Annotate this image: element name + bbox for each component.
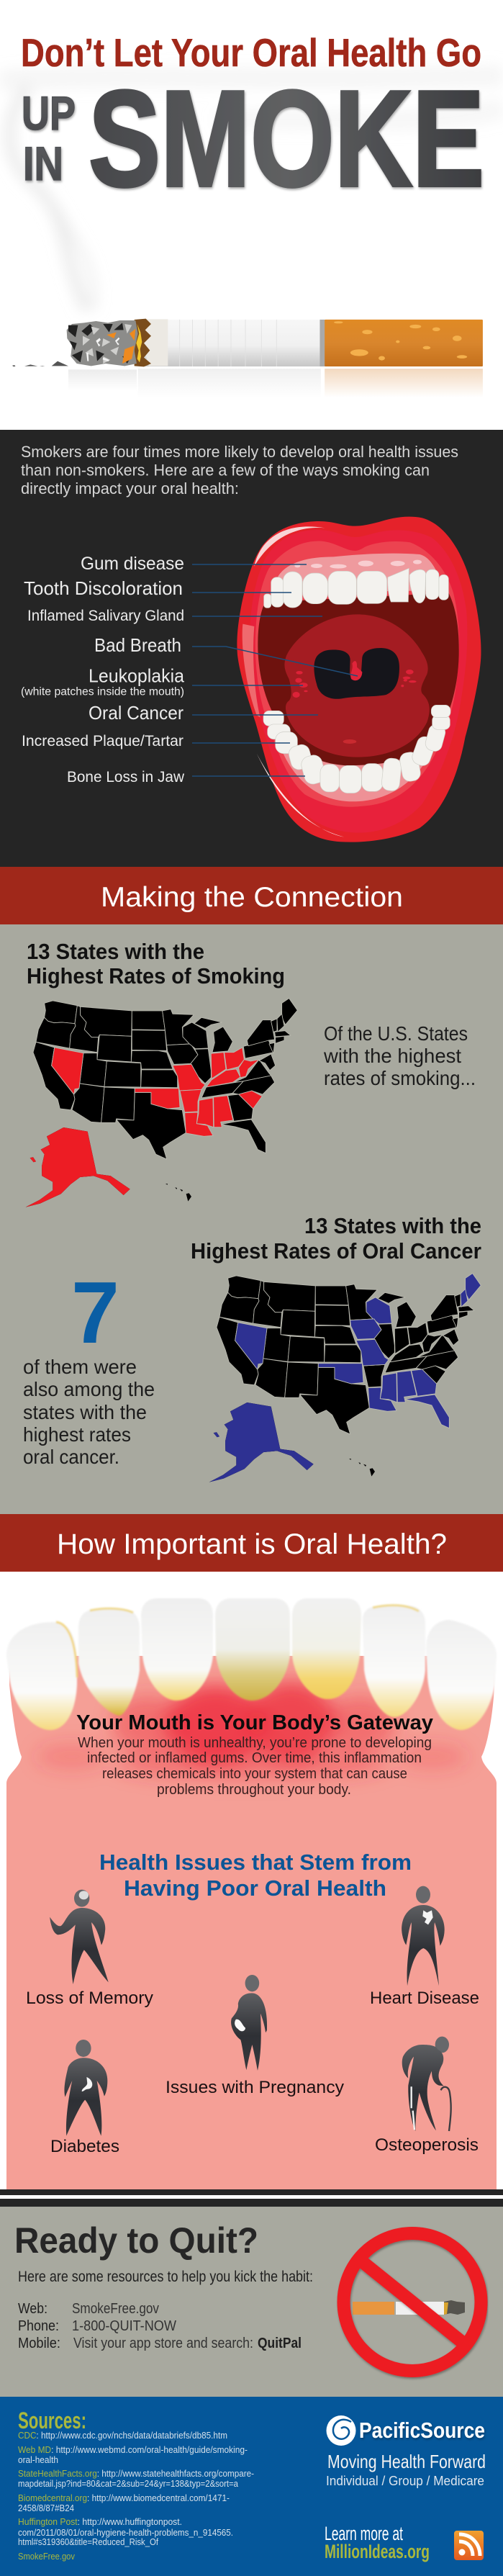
text: of them were: highest rates <box>23 1423 131 1446</box>
text: of them were: states with the <box>23 1401 147 1423</box>
logo: PacificSource wordmark: PacificSource <box>359 2418 485 2443</box>
label: Increased Plaque/Tartar: Increased Plaque/Tartar <box>22 733 183 749</box>
label: Leukoplakia: (white patches inside the mouth) <box>21 685 184 698</box>
text: mobile: QuitPal <box>258 2336 302 2351</box>
label: Gum disease: Gum disease <box>81 554 184 574</box>
label: Diabetes: Diabetes <box>50 2137 119 2156</box>
text: phone <box>18 2318 176 2334</box>
header background <box>0 0 503 430</box>
heading: highest rates of oral cancer: Highest Rates of Oral Cancer <box>191 1238 481 1264</box>
heading: Your Mouth is Your Body's Gateway: Your Mouth is Your Body’s Gateway <box>76 1711 433 1734</box>
text: gateway description: problems throughout your body. <box>157 1782 351 1798</box>
text: of them were: of them were <box>23 1356 137 1378</box>
label: Loss of Memory: Loss of Memory <box>26 1989 153 2008</box>
icon: RSS <box>454 2531 484 2560</box>
heading: highest rates of smoking <box>27 939 285 988</box>
text: source list: html#s319360&title=Reduced_Risk_Of <box>18 2536 158 2547</box>
banner: How Important is Oral Health: How Important is Oral Health? <box>57 1528 447 1560</box>
text: of the U.S. states: Of the U.S. States <box>324 1022 468 1045</box>
map: smoking states <box>26 999 297 1207</box>
intro text <box>21 443 458 497</box>
icon: burning cigarette <box>12 319 483 397</box>
tagline: Individual / Group / Medicare: Individual / Group / Medicare <box>326 2474 484 2488</box>
icon: pregnant person <box>231 1975 267 2071</box>
title: IN: IN <box>23 137 63 190</box>
text: source list: Web MD: http://www.webmd.com/oral-health/guide/smoking- <box>18 2444 248 2455</box>
divider bars <box>0 2189 503 2207</box>
panel: dark mouth section <box>0 430 503 867</box>
text: source list: CDC: http://www.cdc.gov/nchs/data/databriefs/db85.htm <box>18 2430 227 2441</box>
text: gateway description: When your mouth is unhealthy, you’re prone to developing <box>78 1735 432 1751</box>
text: of the U.S. states: with the highest <box>323 1045 461 1067</box>
banner: Making the Connection: Making the Connection <box>101 882 403 913</box>
text: source list: oral-health <box>18 2454 58 2465</box>
label: Osteoperosis: Osteoperosis <box>375 2135 479 2155</box>
text: of the U.S. states: rates of smoking... <box>324 1067 476 1089</box>
icon: no smoking sign <box>344 2233 481 2371</box>
label: Leukoplakia <box>21 665 185 698</box>
text: gateway description: infected or inflamed gums. Over time, this inflammation <box>87 1750 422 1766</box>
intro text: directly impact your oral health: <box>21 479 239 497</box>
text: phone: Phone: <box>18 2318 59 2334</box>
text: phone: 1-800-QUIT-NOW <box>72 2318 176 2334</box>
text: web: Web: <box>18 2301 47 2317</box>
illustration: open mouth <box>237 517 481 842</box>
text: mobile: Mobile: <box>18 2336 60 2351</box>
heading: highest rates of oral cancer <box>191 1213 481 1264</box>
text: web: SmokeFree.gov <box>72 2301 159 2317</box>
text: resources intro: Here are some resources to help you kick the habit: <box>18 2269 313 2285</box>
heading: highest rates of smoking: Highest Rates of Smoking <box>27 963 285 988</box>
text: Learn more at: Learn more at <box>325 2523 403 2544</box>
banner: How Important is Oral Health <box>0 1514 503 1572</box>
callout lines <box>192 564 358 776</box>
map: oral cancer states <box>209 1274 481 1482</box>
heading: highest rates of smoking: 13 States with the <box>27 939 204 964</box>
icon: person with stomach <box>64 2040 107 2136</box>
heading: Ready to Quit?: Ready to Quit? <box>14 2220 258 2261</box>
text: source list: Huffington Post: http://www.huffingtonpost. <box>18 2516 182 2527</box>
text: source list <box>18 2430 254 2562</box>
text: gateway description <box>78 1735 432 1798</box>
label: Oral Cancer: Oral Cancer <box>89 702 183 724</box>
label: Leukoplakia: Leukoplakia <box>89 665 185 687</box>
intro text: than non-smokers. Here are a few of the ways smoking can <box>21 461 430 479</box>
panel: ready to quit background <box>0 2207 503 2397</box>
text: web <box>18 2301 159 2317</box>
title: UP: UP <box>22 86 76 140</box>
text: mobile: Visit your app store and search: <box>73 2336 253 2351</box>
label: Bad Breath: Bad Breath <box>94 634 181 656</box>
heading: Health Issues <box>99 1850 412 1901</box>
text: of them were <box>23 1356 155 1468</box>
icon: person with cane and bones <box>402 2037 451 2131</box>
icon: person with heart <box>402 1886 445 1986</box>
intro text: Smokers are four times more likely to develop oral health issues <box>21 443 458 461</box>
text: source list: 2458/8/87#B24 <box>18 2503 74 2513</box>
link: MillionIdeas.org: MillionIdeas.org <box>325 2541 430 2562</box>
text: gateway description: releases chemicals into your system that can cause <box>102 1766 407 1782</box>
banner: Making the Connection <box>0 867 503 924</box>
label: Tooth Discoloration: Tooth Discoloration <box>24 577 183 599</box>
text: of them were: oral cancer. <box>23 1446 119 1468</box>
heading: Health Issues: Having Poor Oral Health <box>124 1875 386 1901</box>
big number 7: 7 <box>71 1264 119 1361</box>
heading: Sources: Sources: <box>18 2408 86 2433</box>
label: Heart Disease: Heart Disease <box>370 1989 479 2008</box>
panel: gums <box>6 1656 497 2189</box>
gum inflammation <box>36 1681 468 1780</box>
panel: white background <box>0 1572 503 2189</box>
text: source list: Biomedcentral.org: http://www.biomedcentral.com/1471- <box>18 2492 230 2503</box>
panel: connection background <box>0 924 503 1514</box>
text: of the U.S. states <box>323 1022 476 1089</box>
text: source list: SmokeFree.gov <box>18 2551 75 2562</box>
label: Bone Loss in Jaw: Bone Loss in Jaw <box>67 769 185 785</box>
illustration: stained teeth <box>6 1598 497 1730</box>
text: source list: com/2011/08/01/oral-hygiene-health-problems_n_914565. <box>18 2527 233 2538</box>
heading: Health Issues: Health Issues that Stem from <box>99 1850 412 1875</box>
text: source list: StateHealthFacts.org: http://www.statehealthfacts.org/compare- <box>18 2468 254 2479</box>
label: Inflamed Salivary Gland: Inflamed Salivary Gland <box>27 608 184 624</box>
text: source list: mapdetail.jsp?ind=80&cat=2&sub=24&yr=138&typ=2&sort=a <box>18 2478 239 2489</box>
panel: footer <box>0 2397 503 2576</box>
smoke wisps <box>0 76 503 310</box>
label: Issues with Pregnancy: Issues with Pregnancy <box>166 2078 344 2097</box>
icon: person with brain <box>50 1890 109 1984</box>
logo: PacificSource swirl <box>327 2415 355 2446</box>
heading: highest rates of oral cancer: 13 States with the <box>304 1213 481 1238</box>
text: of them were: also among the <box>23 1378 155 1400</box>
